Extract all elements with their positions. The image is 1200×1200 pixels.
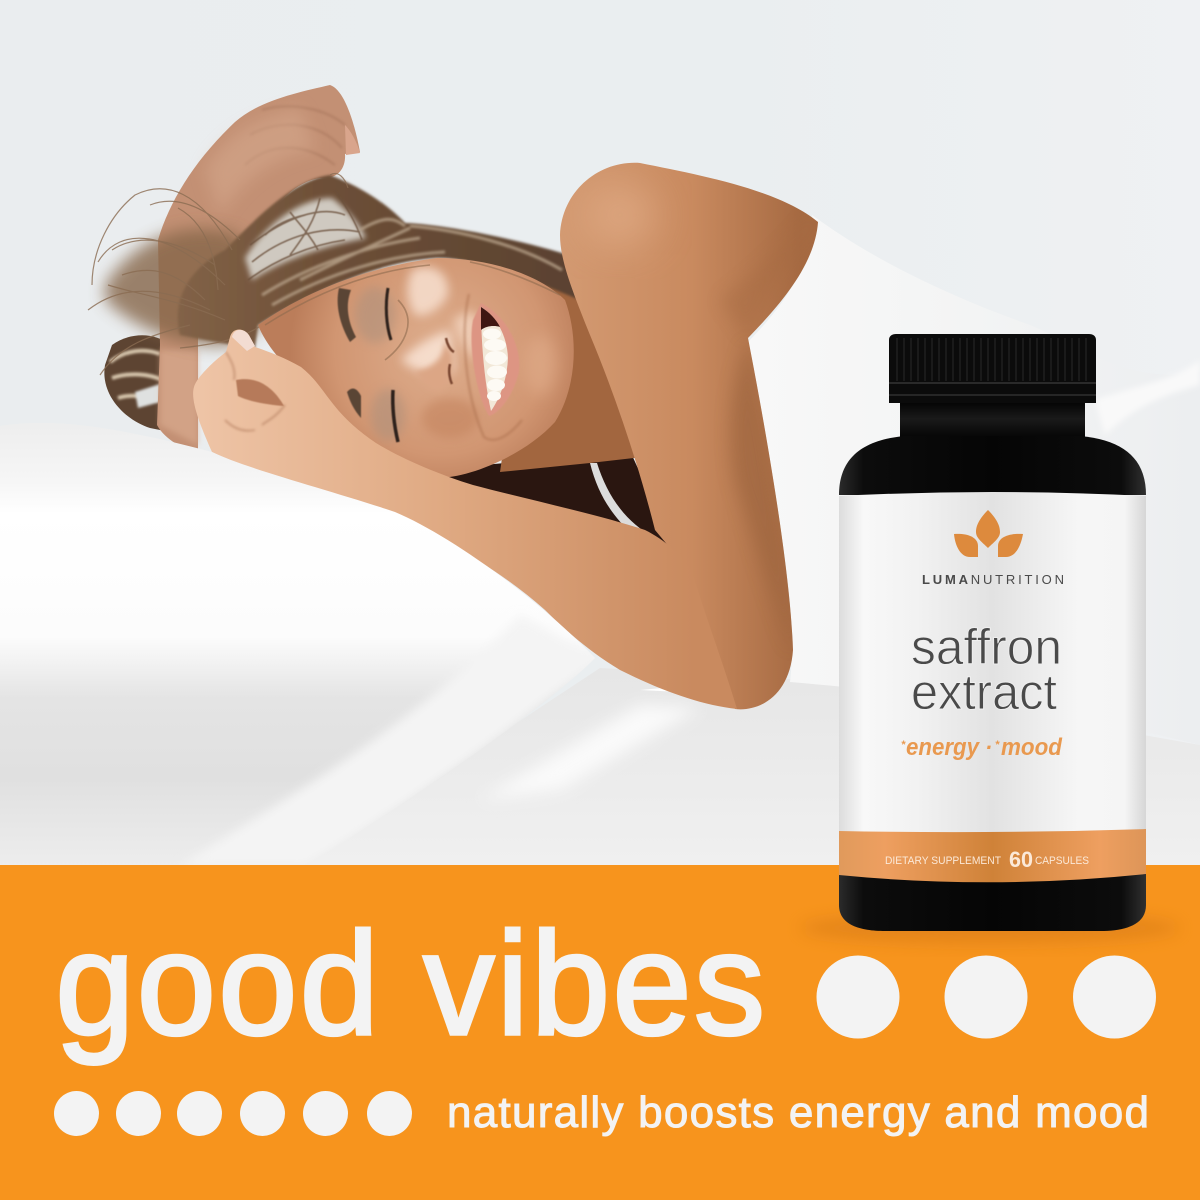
nose	[415, 338, 454, 392]
upper arm and shoulder	[560, 163, 820, 709]
shoulder	[839, 436, 1146, 495]
bottle shadow	[800, 912, 1180, 944]
cheek glow	[524, 335, 556, 395]
hair body	[178, 175, 580, 348]
palm gap	[236, 379, 284, 406]
mattress sheet	[300, 668, 1200, 866]
sun highlights	[401, 267, 478, 375]
band text: CAPSULES	[1035, 855, 1089, 867]
closed eyes	[386, 288, 398, 442]
eyebrows	[338, 288, 361, 418]
product name	[911, 619, 1062, 720]
band text	[885, 847, 1089, 872]
front forearm and hand	[193, 329, 737, 709]
benefits: *	[901, 739, 906, 751]
hair mass	[88, 173, 580, 375]
neck	[500, 265, 660, 472]
fingernail	[232, 330, 255, 351]
brand name: LUMANUTRITION	[922, 572, 1064, 587]
headline: good vibes	[56, 903, 768, 1065]
dark chest shadow	[430, 440, 680, 560]
tagline: naturally boosts energy and mood	[447, 1088, 1149, 1137]
neck	[900, 403, 1085, 438]
benefits: energy	[906, 734, 981, 761]
product name: extract	[911, 664, 1057, 720]
lips	[471, 303, 519, 416]
long hair strands over face	[265, 262, 560, 360]
dark strands	[248, 190, 362, 280]
small dots	[54, 1091, 412, 1136]
fine mid strands	[88, 173, 348, 375]
teeth	[483, 328, 507, 401]
large dots	[816, 956, 1156, 1038]
bright highlight patch	[245, 198, 366, 280]
lower hair bun	[104, 335, 170, 432]
light strands	[262, 219, 562, 305]
cap	[889, 334, 1096, 403]
pillow	[0, 423, 595, 866]
raised arm and fist	[157, 85, 360, 452]
orange label band	[839, 829, 1146, 882]
face	[258, 258, 574, 478]
band text: 60	[1009, 847, 1033, 872]
mouth	[481, 307, 508, 411]
benefits: ·	[985, 735, 992, 760]
smile crease	[465, 294, 522, 440]
mouth shadow	[481, 307, 500, 330]
product name: saffron	[911, 619, 1062, 675]
photo background wall	[0, 0, 1200, 866]
orange footer band	[0, 865, 1200, 1200]
soft left frizz	[105, 229, 265, 346]
benefits	[901, 734, 1063, 761]
label	[839, 492, 1146, 832]
tank top strap	[590, 463, 655, 538]
band text: DIETARY SUPPLEMENT	[885, 855, 1001, 867]
benefits: mood	[1001, 734, 1063, 761]
base	[839, 870, 1146, 931]
logo leaves	[954, 510, 1023, 557]
eye shadow	[355, 287, 478, 441]
benefits: *	[995, 739, 1000, 751]
product bottle	[839, 334, 1146, 931]
finger creases	[225, 352, 285, 431]
white tank top	[745, 215, 1200, 745]
